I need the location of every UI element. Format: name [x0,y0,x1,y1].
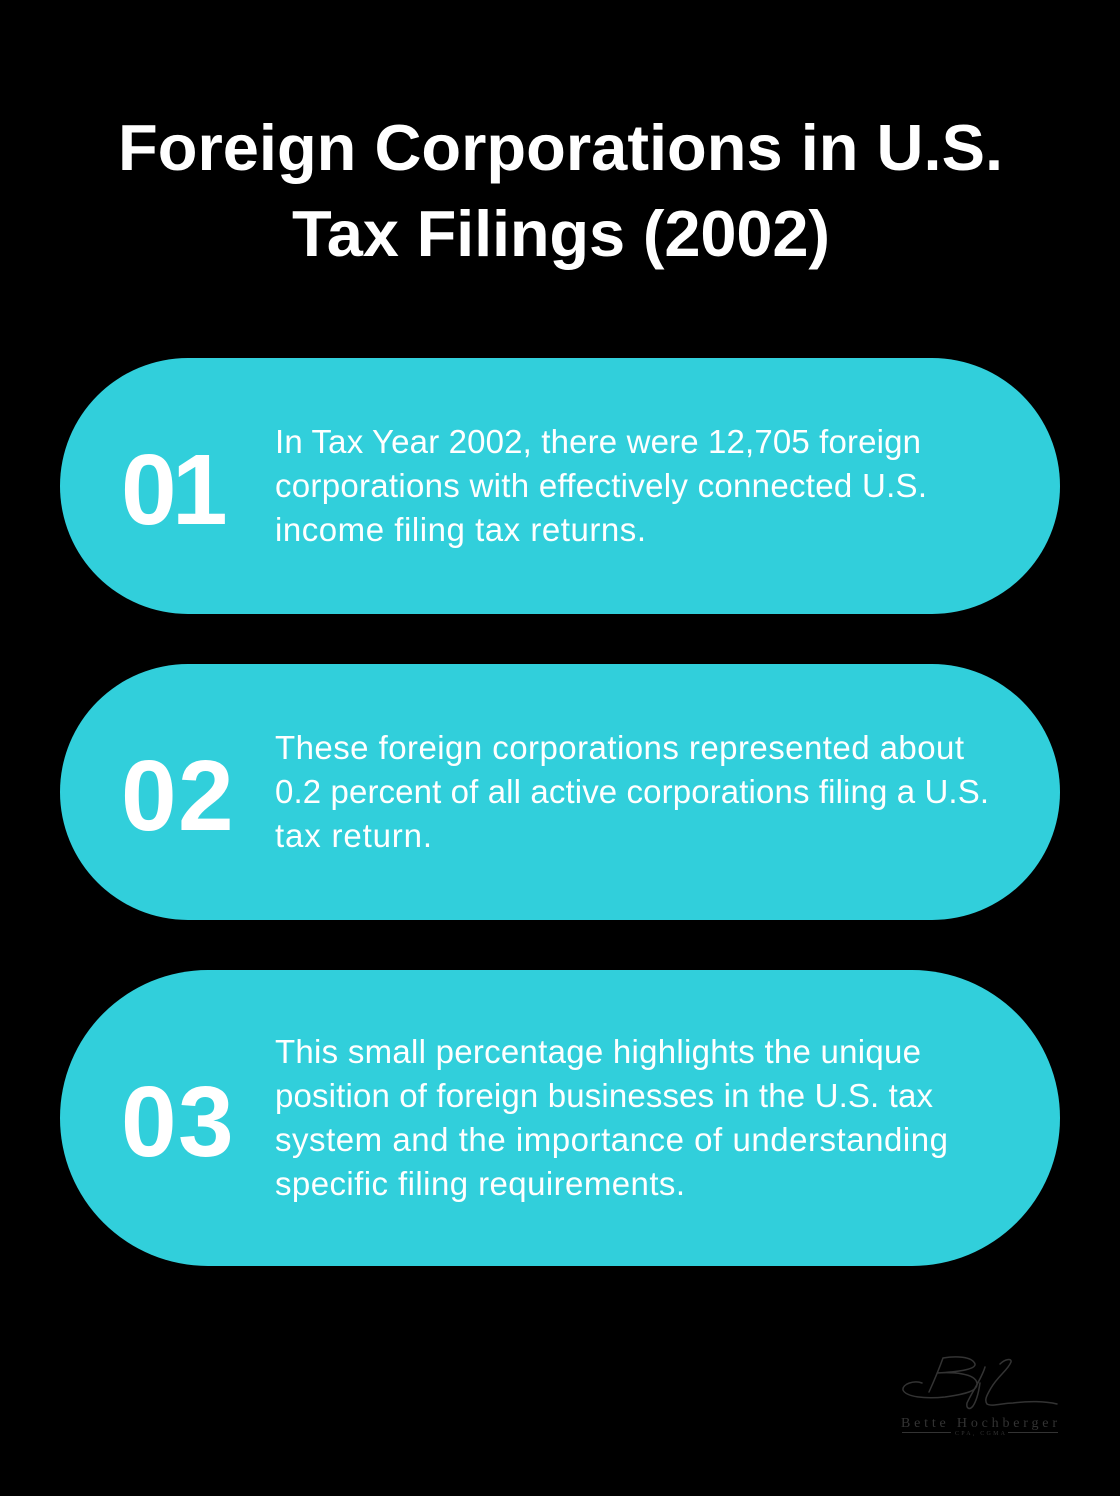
text: item 01: income filing tax returns. [275,511,646,548]
text: item 02: tax return. [275,817,432,854]
number 01: 01 [121,434,228,546]
text: item 01: In Tax Year 2002, there were 12,705 foreign [275,423,921,460]
text: item 02: These foreign corporations represented about [275,729,964,766]
panel: item 02 [60,664,1060,920]
panel: item 01 [60,358,1060,614]
panel: item 03 [60,970,1060,1266]
text: item 02: 0.2 percent of all active corporations filing a U.S. [275,773,989,810]
logo: Bette Hochberger signature [901,1357,1058,1437]
number 03: 03 [121,1066,234,1178]
text: item 03: position of foreign businesses in the U.S. tax [275,1077,934,1114]
text: item 03: This small percentage highlights the unique [275,1033,921,1070]
icon: BH monogram [903,1357,1057,1408]
text: item 01 [275,423,927,548]
number 02: 02 [121,740,234,852]
logo credentials: CPA, CGMA [955,1431,1006,1437]
title: Foreign Corporations in U.S. [118,111,1003,184]
text: item 03 [275,1033,948,1202]
text: item 03: specific filing requirements. [275,1165,685,1202]
text: item 01: corporations with effectively connected U.S. [275,467,927,504]
logo name: Bette Hochberger [901,1416,1057,1431]
text: item 02 [275,729,989,854]
title: Tax Filings (2002) [292,197,830,270]
title [118,111,1003,270]
text: item 03: system and the importance of understanding [275,1121,948,1158]
